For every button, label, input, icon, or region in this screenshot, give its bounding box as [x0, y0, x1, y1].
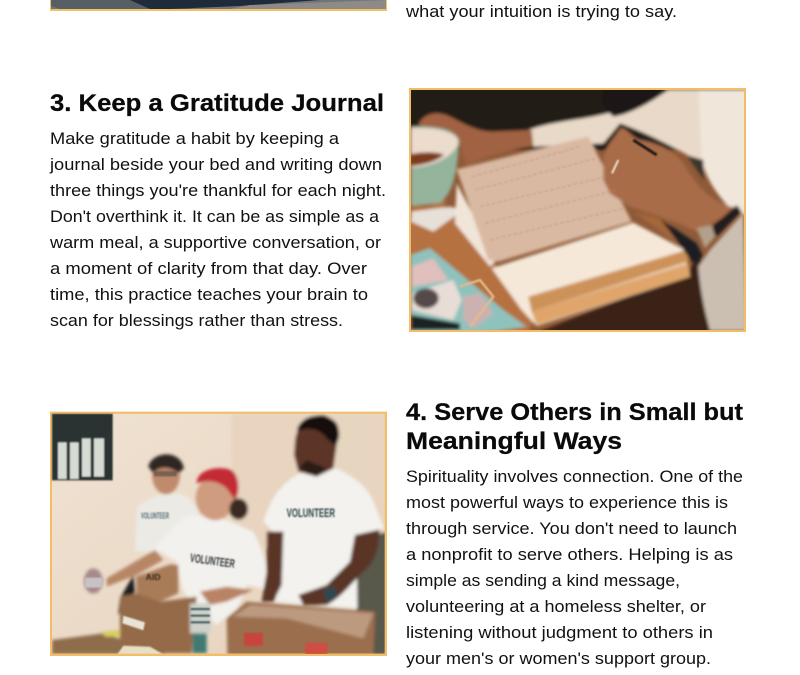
sleeve back: [528, 90, 703, 160]
woman: [155, 515, 266, 625]
man right: [263, 468, 384, 608]
text block: gratitude journal description: time, this practice teaches your brain to: [50, 285, 368, 304]
photo: open journal, tea cup and hands: [407, 87, 750, 337]
text block: gratitude journal description: warm meal, a supportive conversation, or: [49, 233, 382, 252]
notes: [411, 248, 527, 333]
right hand: [603, 128, 738, 232]
photo: three volunteers with boxes: VOLUNTEER: [287, 506, 335, 520]
text block: gratitude journal description: journal beside your bed and writing down: [49, 155, 382, 174]
photo: cropped landscape from previous section: [50, 0, 387, 11]
text block: gratitude journal description: Don't overthink it. It can be as simple as a: [50, 207, 380, 226]
photo: three volunteers with boxes: VOLUNTEER: [189, 551, 236, 571]
book upper page: [457, 137, 632, 262]
dark background: [407, 87, 750, 150]
book lower pages: [455, 183, 497, 267]
left hand: [418, 113, 533, 165]
text block: serving others description: a nonprofit to serve others. Helping is as: [406, 545, 733, 564]
text block: gratitude journal description: Make gratitude a habit by keeping a: [50, 129, 340, 148]
text block: gratitude journal description: three things you're thankful for each night.: [50, 181, 386, 200]
boxes: [136, 564, 178, 602]
man left: [135, 493, 198, 552]
text block: gratitude journal description: [49, 129, 386, 330]
text: end of section 2 paragraph: what your intuition is trying to say.: [405, 2, 677, 21]
text block: serving others description: [406, 467, 743, 668]
text block: serving others description: volunteering at a homeless shelter, or: [406, 597, 706, 616]
text block: gratitude journal description: scan for blessings rather than stress.: [50, 311, 343, 330]
heading: 4. Serve Others in Small but Meaningful Ways: 4. Serve Others in Small but: [406, 399, 743, 426]
wall sections: [232, 414, 388, 547]
text block: serving others description: most powerful ways to experience this is: [406, 493, 728, 512]
photo: three volunteers with boxes: VOLUNTEER: [141, 510, 169, 520]
photo: three volunteers with boxes: [50, 412, 388, 656]
text block: serving others description: Spirituality involves connection. One of the: [406, 467, 743, 486]
text block: serving others description: your men's or women's support group.: [406, 649, 711, 668]
text block: serving others description: simple as sending a kind message,: [406, 571, 680, 590]
heading: 4. Serve Others in Small but Meaningful Ways: Meaningful Ways: [406, 428, 622, 455]
watch and sleeve: [710, 205, 742, 237]
window: [52, 414, 113, 480]
text block: serving others description: through service. You don't need to launch: [406, 519, 737, 538]
photo: three volunteers with boxes: AID: [146, 572, 161, 582]
table: [407, 207, 533, 337]
ground: [52, 633, 167, 654]
cup: [411, 126, 459, 206]
heading: 4. Serve Others in Small but Meaningful Ways: [406, 399, 743, 455]
text block: gratitude journal description: a moment of clarity from that day. Over: [50, 259, 368, 278]
heading: 3. Keep a Gratitude Journal: 3. Keep a Gratitude Journal: [50, 90, 384, 117]
text block: serving others description: listening without judgment to others in: [406, 623, 713, 642]
